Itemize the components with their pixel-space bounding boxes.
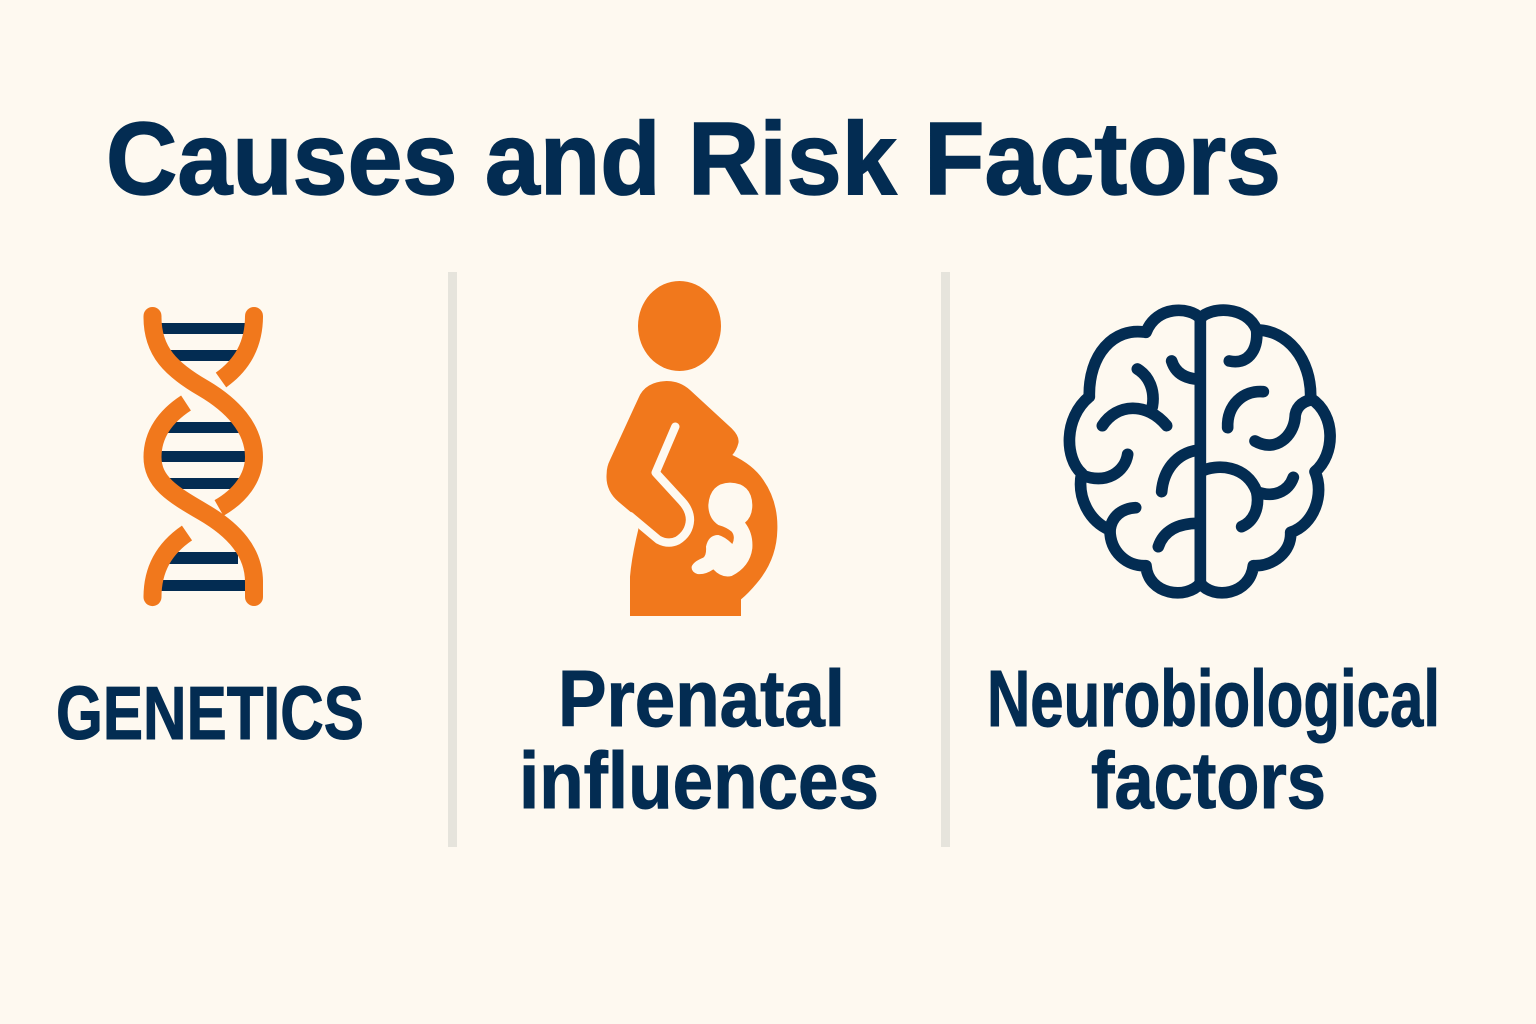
label: prenatal influences: influences	[519, 736, 879, 825]
panel: neurobiological factors	[987, 310, 1440, 825]
label: prenatal influences: Prenatal	[558, 654, 845, 743]
label: neurobiological factors	[987, 654, 1440, 825]
icon: brain	[1069, 310, 1330, 593]
label: prenatal influences	[519, 654, 879, 825]
panel: genetics	[56, 316, 364, 755]
panel: prenatal influences	[519, 281, 879, 825]
icon: pregnant figure	[606, 281, 777, 616]
title: Causes and Risk Factors	[106, 101, 1281, 216]
label: neurobiological factors: factors	[1091, 736, 1326, 825]
label: genetics: GENETICS	[56, 671, 364, 755]
icon: DNA double helix	[152, 316, 254, 597]
